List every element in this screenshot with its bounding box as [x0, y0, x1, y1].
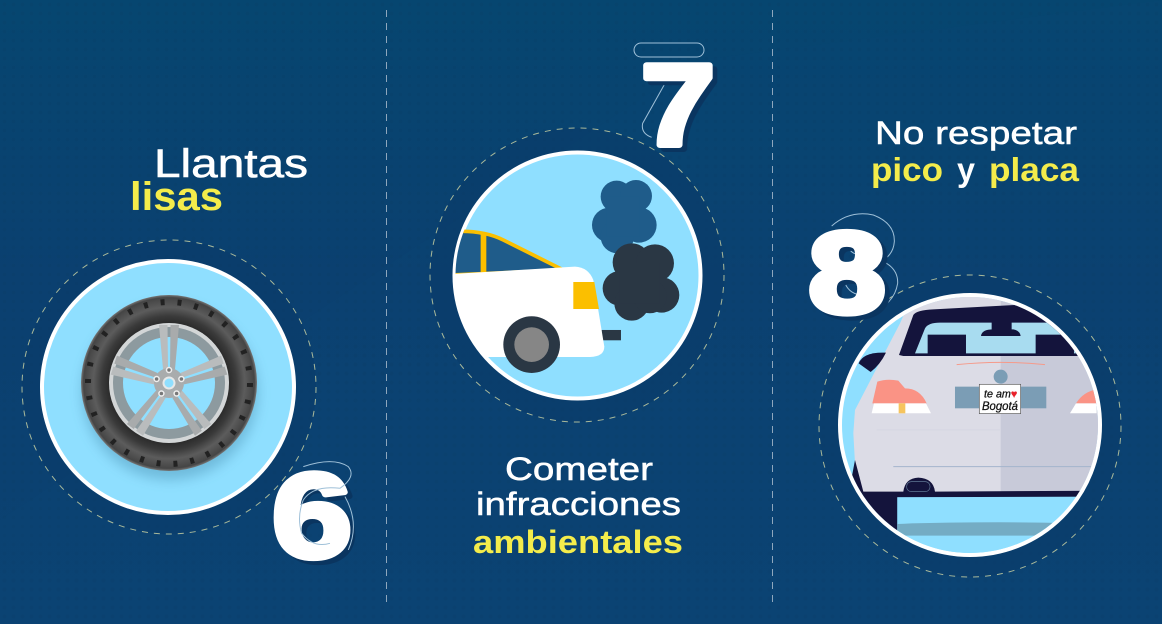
icon circle: car rear: [840, 290, 1111, 561]
panel: pico y placa: [809, 115, 1121, 577]
heading: No respetar pico y placa: pico: [871, 151, 943, 188]
car windshield: [452, 231, 563, 275]
license plate: [979, 384, 1021, 414]
icon: tire: [81, 295, 257, 471]
panel: llantas lisas: [22, 142, 353, 583]
smoke clouds: [592, 180, 679, 321]
rear window: [899, 304, 1087, 356]
license plate: te am♥: [984, 388, 1017, 400]
license plate: Bogotá: [982, 399, 1018, 413]
car body: [853, 290, 1110, 493]
icon circle: tire: [42, 261, 294, 513]
road stripe: [897, 497, 1076, 553]
heading: Llantas lisas: lisas: [130, 175, 223, 219]
dashed ring 8: [819, 275, 1121, 577]
heading: Llantas lisas: [130, 142, 308, 219]
heading: No respetar pico y placa: placa: [989, 151, 1080, 188]
number 6: 6: [272, 449, 352, 583]
heading: Cometer infracciones ambientales: ambientales: [473, 524, 683, 560]
icon circle: car exhaust: [447, 152, 700, 398]
tail lights: [872, 380, 927, 403]
side mirror: [859, 353, 886, 372]
dashed ring 7: [430, 128, 724, 422]
heading: Cometer infracciones ambientales: infracciones: [476, 486, 681, 522]
number 7: 7: [641, 41, 715, 170]
dashed ring 6: [22, 240, 316, 534]
number 8: 8: [809, 209, 885, 336]
heading: Llantas lisas: Llantas: [154, 142, 308, 186]
bumper and exhaust: [852, 460, 1080, 530]
car body: [447, 267, 604, 357]
heading: No respetar pico y placa: y: [957, 151, 976, 188]
heading: Cometer infracciones ambientales: Cometer: [505, 451, 653, 487]
heading: No respetar pico y placa: [871, 115, 1080, 188]
brake light line: [957, 362, 1045, 365]
car wheel: [503, 316, 560, 373]
panel: infracciones ambientales: [430, 41, 724, 560]
heading: No respetar pico y placa: No respetar: [875, 115, 1077, 151]
logo and plate recess: [994, 370, 1008, 384]
heading: Cometer infracciones ambientales: [473, 451, 683, 560]
body crease lines: [893, 466, 1092, 468]
exhaust pipe: [602, 330, 621, 340]
